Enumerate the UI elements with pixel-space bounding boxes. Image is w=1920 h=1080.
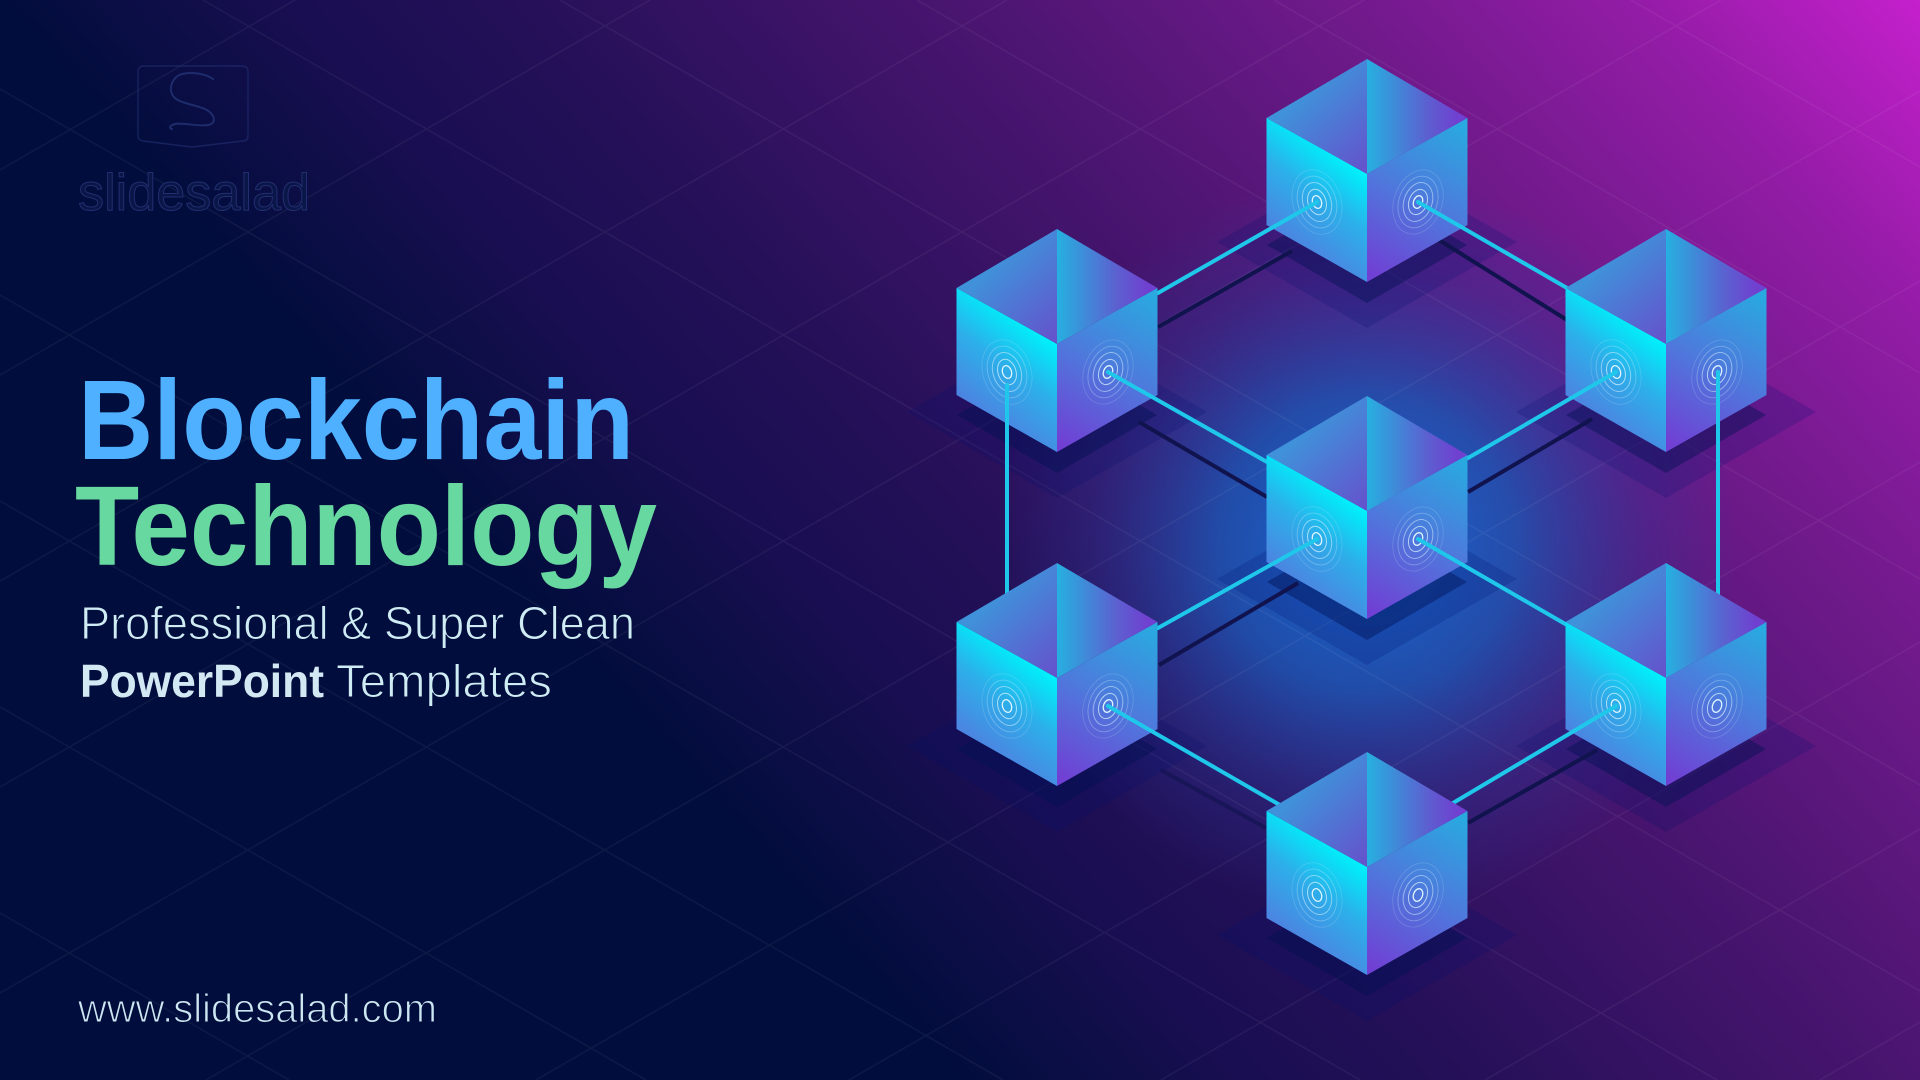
links from top cube bbox=[1158, 202, 1567, 293]
Templates light: Templates bbox=[336, 655, 552, 707]
subtitle line 1: Professional & Super Clean bbox=[80, 597, 635, 649]
links from lower cubes bbox=[1108, 706, 1616, 808]
links from center cube bbox=[1158, 539, 1567, 628]
watermark wordmark: slidesalad bbox=[78, 164, 310, 222]
blockchain network diagram bbox=[907, 59, 1816, 1021]
cube: center bbox=[1266, 396, 1468, 619]
watermark icon bbox=[138, 66, 248, 147]
title: Blockchain: Blockchain bbox=[78, 357, 634, 483]
subtitle line 2 bbox=[80, 655, 552, 707]
cube: lower right bbox=[1566, 563, 1766, 786]
title: Technology: Technology bbox=[75, 463, 657, 589]
PowerPoint bold: PowerPoint bbox=[80, 655, 324, 707]
cube: upper right bbox=[1566, 229, 1766, 452]
links from upper cubes bbox=[1007, 372, 1718, 600]
watermark logo bbox=[78, 66, 310, 222]
cube: top bbox=[1266, 59, 1468, 282]
cube: upper left bbox=[956, 229, 1158, 452]
cube: lower left bbox=[956, 563, 1158, 786]
cube shadows bbox=[907, 156, 1816, 1021]
website url: www.slidesalad.com bbox=[77, 987, 437, 1031]
central blue glow bbox=[990, 170, 1744, 920]
cube: bottom bbox=[1266, 752, 1468, 975]
dark under-links bbox=[1139, 240, 1597, 828]
